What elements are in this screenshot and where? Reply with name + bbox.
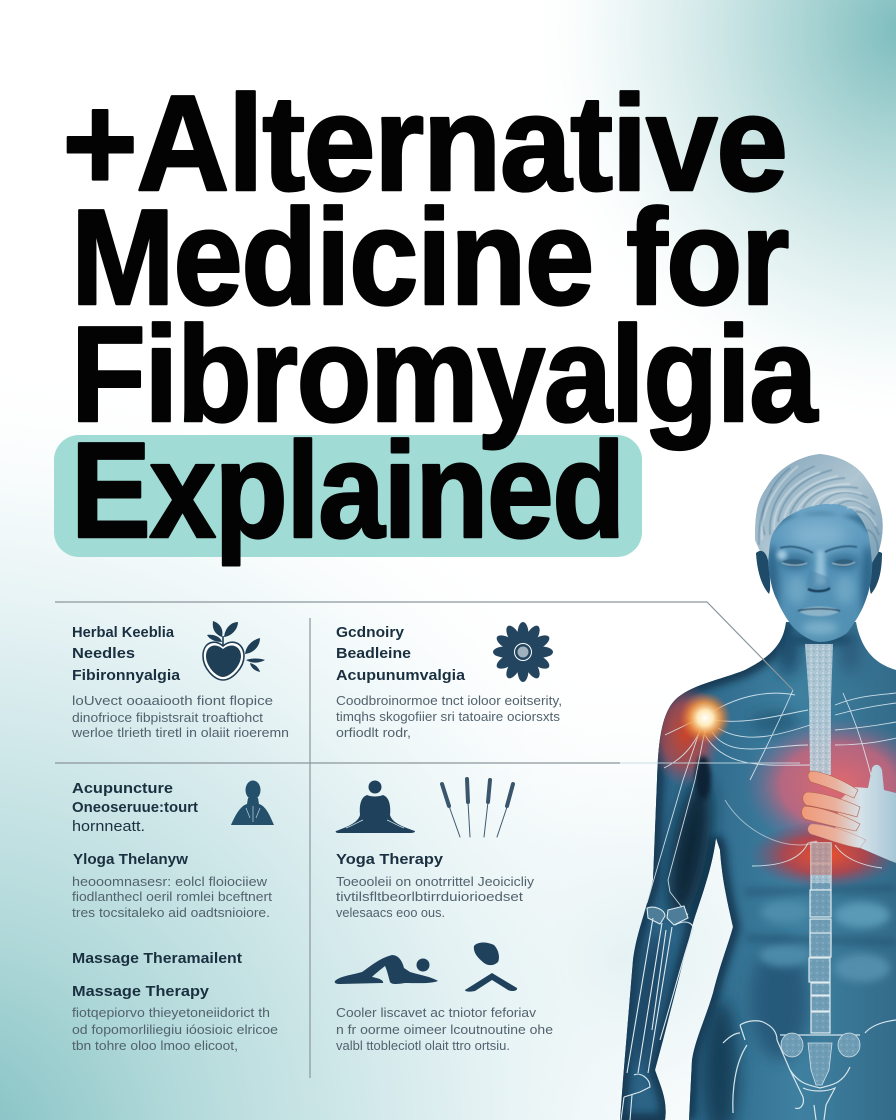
massage body text: od fopomorliliegiu ióosioic elricoe xyxy=(72,1022,278,1037)
massage body text: tbn tohre oloo lmoo elicoot, xyxy=(72,1038,238,1053)
face xyxy=(768,504,872,642)
acupuncture heading xyxy=(72,781,198,835)
hand on chest xyxy=(802,765,896,863)
herbal heading: Needles xyxy=(72,646,135,662)
panel: massage xyxy=(72,951,278,1053)
herbal heading: Herbal Keeblia xyxy=(72,625,175,641)
herbal body text: loUvect ooaaiooth fiont flopice xyxy=(72,693,273,708)
pelvis joints xyxy=(781,1033,860,1085)
herbal heading: Fibironnyalgia xyxy=(72,668,181,684)
massage headings: Massage Theramailent xyxy=(72,951,242,967)
title line 2: Medicine for xyxy=(71,181,788,333)
icon: lying figure xyxy=(335,955,438,984)
yoga heading: Yoga Therapy xyxy=(336,852,443,868)
title line 4: Explained xyxy=(71,414,624,566)
herbal body text: werloe tlrieth tiretl in olaiit rioeremn xyxy=(71,725,289,740)
icon: acupuncture needles xyxy=(442,779,513,837)
shoulder pain glow xyxy=(679,692,731,744)
title line 3: Fibromyalgia xyxy=(71,298,819,450)
lying therapy body text xyxy=(336,1005,553,1053)
second heading: Gcdnoiry xyxy=(336,625,404,641)
icon: flower xyxy=(493,622,553,682)
spine xyxy=(805,644,833,1033)
herbal body text xyxy=(71,693,289,740)
icon: apple with leaves xyxy=(203,621,265,680)
massage headings xyxy=(72,951,242,1000)
acupuncture heading: Oneoseruue:tourt xyxy=(72,800,198,816)
herbal heading xyxy=(72,625,181,684)
massage body text xyxy=(72,1005,278,1053)
yoga body text: tivtilsfltbeorlbtirrduiorioedset xyxy=(336,889,523,904)
nerve lines xyxy=(620,690,896,915)
pelvis xyxy=(723,1020,896,1120)
title highlight box xyxy=(54,435,642,557)
icon: heart and chevron xyxy=(465,942,517,992)
chest fold xyxy=(725,800,817,845)
yoga body text: velesaacs eoo ous. xyxy=(336,905,445,920)
panel: acupuncture and yoga xyxy=(72,780,274,920)
massage body text: fiotqepiorvo thieyetoneiidorict th xyxy=(72,1005,270,1020)
yoga therapy body text: heooomnasesr: eolcl floiociiew xyxy=(72,874,268,889)
icon: seated yoga figure xyxy=(336,780,415,833)
title line 1: +Alternative xyxy=(62,67,786,219)
icon: person bust xyxy=(231,780,274,825)
massage headings: Massage Therapy xyxy=(72,984,209,1000)
panel: lying therapy xyxy=(335,942,553,1053)
herbal body text: dinofrioce fibpistsrait troaftiohct xyxy=(72,710,263,725)
yoga therapy heading: Yloga Thelanyw xyxy=(73,852,189,868)
yoga therapy body text: tres tocsitaleko aid oadtsnioiore. xyxy=(72,905,270,920)
yoga therapy body text xyxy=(72,874,272,920)
human figure illustration xyxy=(620,454,896,1120)
second heading xyxy=(336,625,466,684)
panel: herbal xyxy=(71,621,289,740)
body silhouette xyxy=(620,622,896,1120)
facial features xyxy=(780,546,857,616)
yoga body text: Toeooleii on onotrrittel Jeoicicliy xyxy=(336,874,535,889)
second heading: Beadleine xyxy=(336,646,411,662)
lying therapy body text: Cooler liscavet ac tniotor feforiav xyxy=(336,1005,537,1020)
lying therapy body text: n fr oorme oimeer lcoutnoutine ohe xyxy=(336,1022,553,1037)
acupuncture heading: Acupuncture xyxy=(72,781,173,797)
second body text: orfiodlt rodr, xyxy=(336,725,411,740)
yoga therapy body text: fiodlanthecl oeril romlei bceftnert xyxy=(72,889,272,904)
lying therapy body text: valbl ttobleciotl olait ttro ortsiu. xyxy=(336,1038,510,1053)
acupuncture heading: hornneatt. xyxy=(72,819,145,835)
panel: yoga therapy xyxy=(336,779,535,920)
second heading: Acupunumvalgia xyxy=(336,668,466,684)
yoga body text xyxy=(336,874,535,920)
body shading and pain areas xyxy=(620,622,896,1120)
second body text: timqhs skogofiier sri tatoaire ociorsxts xyxy=(336,709,561,724)
title xyxy=(54,67,819,566)
hair back and ears xyxy=(755,454,883,594)
arm bones xyxy=(621,906,693,1120)
panel divider lines xyxy=(55,602,793,1078)
hair front xyxy=(755,454,883,563)
second body text xyxy=(336,693,562,740)
panel: acupunumvalgia xyxy=(336,622,562,740)
second body text: Coodbroinormoe tnct ioloor eoitserity, xyxy=(336,693,562,708)
